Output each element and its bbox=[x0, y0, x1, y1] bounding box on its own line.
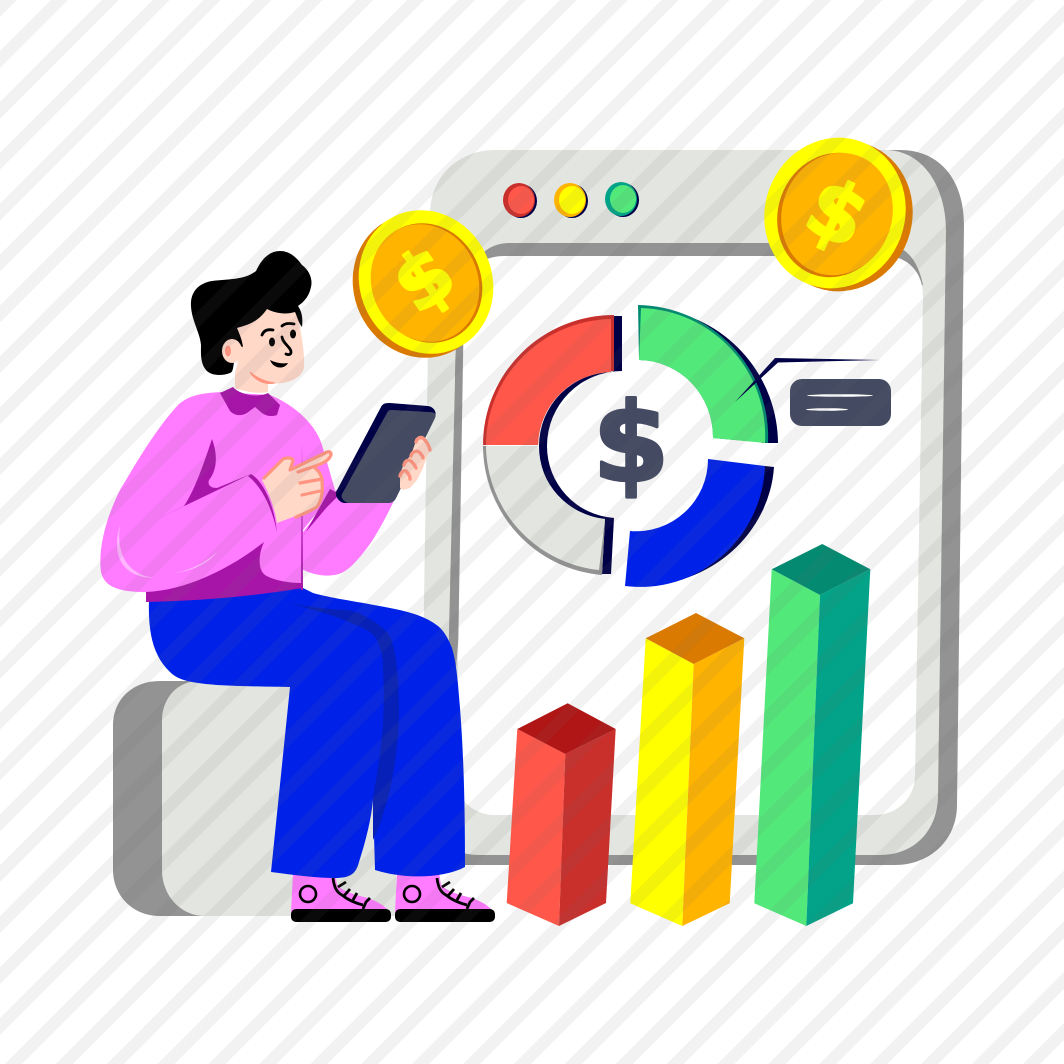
eyes and brows bbox=[262, 323, 296, 368]
segment: blue bbox=[625, 459, 774, 587]
bar: yellow bbox=[630, 613, 744, 926]
neck and face bbox=[235, 306, 304, 393]
dollar sign: $ bbox=[593, 379, 669, 507]
window button: green bbox=[605, 182, 639, 217]
window button: yellow bbox=[554, 183, 588, 218]
trousers bbox=[149, 588, 465, 878]
torso bbox=[100, 392, 340, 602]
coin: right bbox=[743, 118, 934, 311]
donut chart bbox=[483, 305, 778, 587]
chin line bbox=[250, 372, 275, 384]
donut shadow bbox=[539, 316, 622, 574]
hand: right bbox=[400, 437, 430, 490]
panel: browser window bbox=[421, 150, 964, 865]
underarm shadow bbox=[303, 489, 340, 537]
shoe: right bbox=[395, 872, 495, 922]
shirt hem shadow bbox=[146, 542, 302, 602]
segment: grey bbox=[483, 446, 605, 575]
hand: left bbox=[262, 451, 331, 523]
window button: red bbox=[503, 183, 537, 218]
forearm: right bbox=[300, 440, 400, 576]
callout bbox=[735, 358, 891, 426]
trouser fold bbox=[285, 602, 399, 840]
tablet bbox=[336, 403, 436, 503]
collar bbox=[220, 387, 280, 416]
segment: green bbox=[638, 305, 778, 443]
bar chart bbox=[507, 544, 870, 926]
nose bbox=[282, 337, 291, 355]
mouth bbox=[270, 360, 288, 368]
coin: right: $ bbox=[792, 159, 882, 267]
cuff bbox=[248, 474, 277, 532]
sleeve fold bbox=[151, 439, 251, 522]
bar: green bbox=[754, 544, 870, 926]
callout leader line bbox=[735, 358, 880, 402]
coin: left: $ bbox=[376, 227, 471, 331]
bench bbox=[113, 681, 396, 916]
person bbox=[100, 251, 495, 922]
bar: red bbox=[507, 703, 616, 926]
segment: red bbox=[483, 315, 614, 445]
side seam bbox=[301, 443, 303, 590]
callout box bbox=[790, 379, 891, 426]
ear bbox=[222, 339, 242, 363]
sleeve highlights bbox=[117, 525, 217, 578]
shoe: left bbox=[291, 872, 391, 922]
coin: left bbox=[329, 188, 517, 380]
hair bbox=[191, 251, 312, 375]
